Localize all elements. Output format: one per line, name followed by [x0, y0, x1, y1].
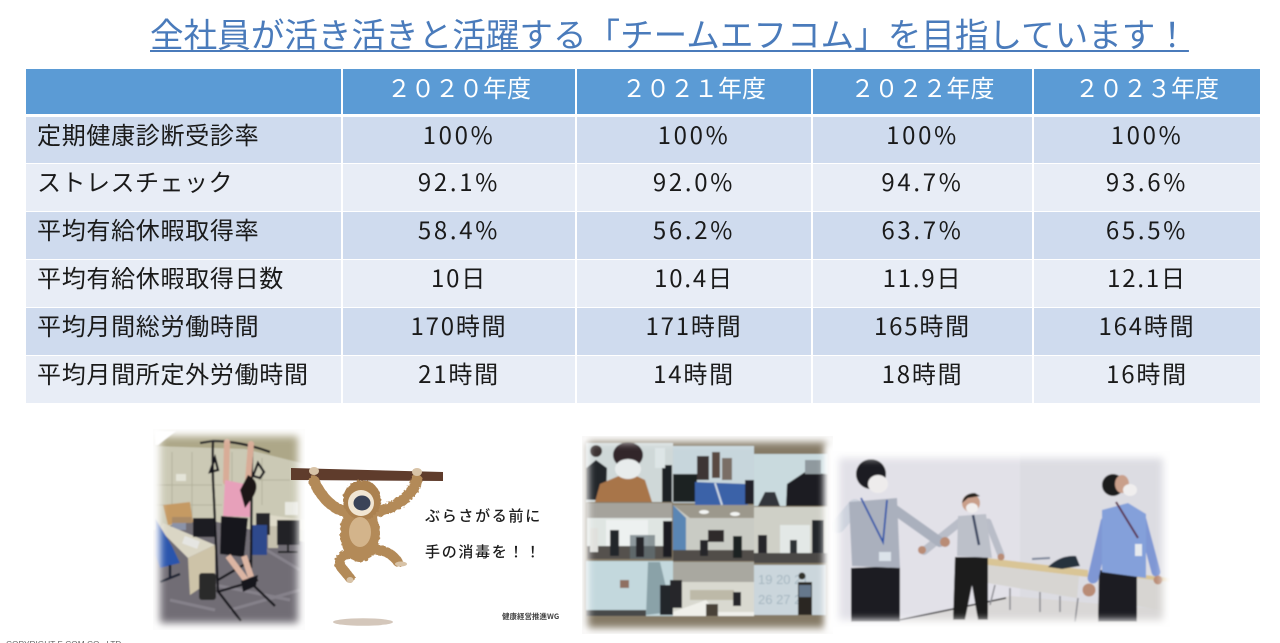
row: paid leave rate — [26, 211, 1260, 259]
row: monthly overtime hours — [26, 355, 1260, 403]
boxes on desk — [163, 502, 193, 525]
back desks — [285, 502, 298, 515]
row: monthly overtime hours: 平均月間所定外労働時間 — [37, 355, 309, 390]
row: monthly overtime hours: 21時間 — [418, 355, 500, 390]
photo: online meeting video wall: 26 27 28 — [758, 592, 809, 607]
row: paid leave days: 平均有給休暇取得日数 — [37, 259, 284, 294]
row: paid leave days: 11.9日 — [883, 259, 962, 294]
photo: online meeting video wall — [582, 436, 833, 634]
row 3 — [586, 561, 673, 616]
row: paid leave rate: 63.7% — [881, 211, 964, 246]
row: health check rate: 100% — [886, 116, 959, 151]
pull-up tower — [200, 441, 275, 621]
row: monthly working hours: 170時間 — [411, 307, 507, 342]
row: stress check — [26, 163, 1260, 211]
row: monthly overtime hours: 16時間 — [1106, 355, 1188, 390]
row: monthly working hours — [26, 307, 1260, 355]
table header row: ２０２３年度 — [1075, 69, 1219, 104]
row: stress check: 94.7% — [881, 163, 964, 198]
caption: disinfect hands before hanging: 健康経営推進WG — [502, 611, 559, 622]
table header row: ２０２０年度 — [387, 69, 531, 104]
blue chair — [155, 518, 180, 568]
table — [987, 558, 1088, 577]
caption: disinfect hands before hanging — [425, 505, 559, 622]
desk — [160, 523, 215, 558]
row: health check rate — [26, 116, 1260, 163]
row: health check rate: 100% — [1111, 116, 1183, 151]
row: paid leave rate: 65.5% — [1106, 211, 1188, 246]
row: monthly working hours: 165時間 — [874, 307, 971, 342]
caption: disinfect hands before hanging: 手の消毒を！！ — [425, 541, 542, 562]
photo strip — [154, 430, 1168, 634]
row: monthly working hours: 164時間 — [1099, 307, 1195, 342]
photo: online meeting video wall: 19 20 21 — [758, 572, 809, 587]
row: monthly working hours: 171時間 — [646, 307, 742, 342]
row: monthly overtime hours: 14時間 — [653, 355, 735, 390]
row: stress check: 92.0% — [653, 163, 735, 198]
row: monthly working hours: 平均月間総労働時間 — [37, 307, 259, 342]
row: stress check: ストレスチェック — [37, 163, 233, 198]
photo: woman hanging from pull-up bar — [153, 429, 305, 630]
ground shadow — [333, 618, 393, 626]
row: health check rate: 定期健康診断受診率 — [37, 116, 259, 151]
row 1 — [586, 443, 673, 502]
branch — [291, 468, 443, 481]
table header row: ２０２２年度 — [850, 69, 994, 104]
man 1 — [851, 566, 900, 622]
table header row — [26, 69, 1260, 114]
woman — [226, 442, 251, 482]
row: stress check: 92.1% — [418, 163, 500, 198]
illustration: gibbon hanging from branch — [291, 467, 443, 626]
title: 全社員が活き活きと活躍する「チームエフコム」を目指しています！ — [150, 8, 1189, 57]
row: stress check: 93.6% — [1106, 163, 1188, 198]
photo: three masked employees stretching — [832, 451, 1170, 627]
row: paid leave rate: 平均有給休暇取得率 — [37, 211, 259, 246]
table header row: ２０２１年度 — [622, 69, 766, 104]
row: monthly overtime hours: 18時間 — [882, 355, 963, 390]
man 2 — [953, 557, 988, 620]
man 3 — [1098, 570, 1137, 622]
row: health check rate: 100% — [423, 116, 495, 151]
health data table — [26, 69, 1260, 403]
row: paid leave days: 10.4日 — [654, 259, 734, 294]
row: paid leave rate: 56.2% — [653, 211, 735, 246]
row: health check rate: 100% — [658, 116, 730, 151]
row 2 — [586, 517, 673, 548]
row: paid leave days: 10日 — [431, 259, 487, 294]
caption: disinfect hands before hanging: ぶらさがる前に — [425, 505, 542, 526]
row: paid leave days — [26, 259, 1260, 307]
row: paid leave days: 12.1日 — [1107, 259, 1187, 294]
row: paid leave rate: 58.4% — [418, 211, 500, 246]
bin — [199, 573, 216, 600]
gibbon body — [314, 480, 417, 578]
